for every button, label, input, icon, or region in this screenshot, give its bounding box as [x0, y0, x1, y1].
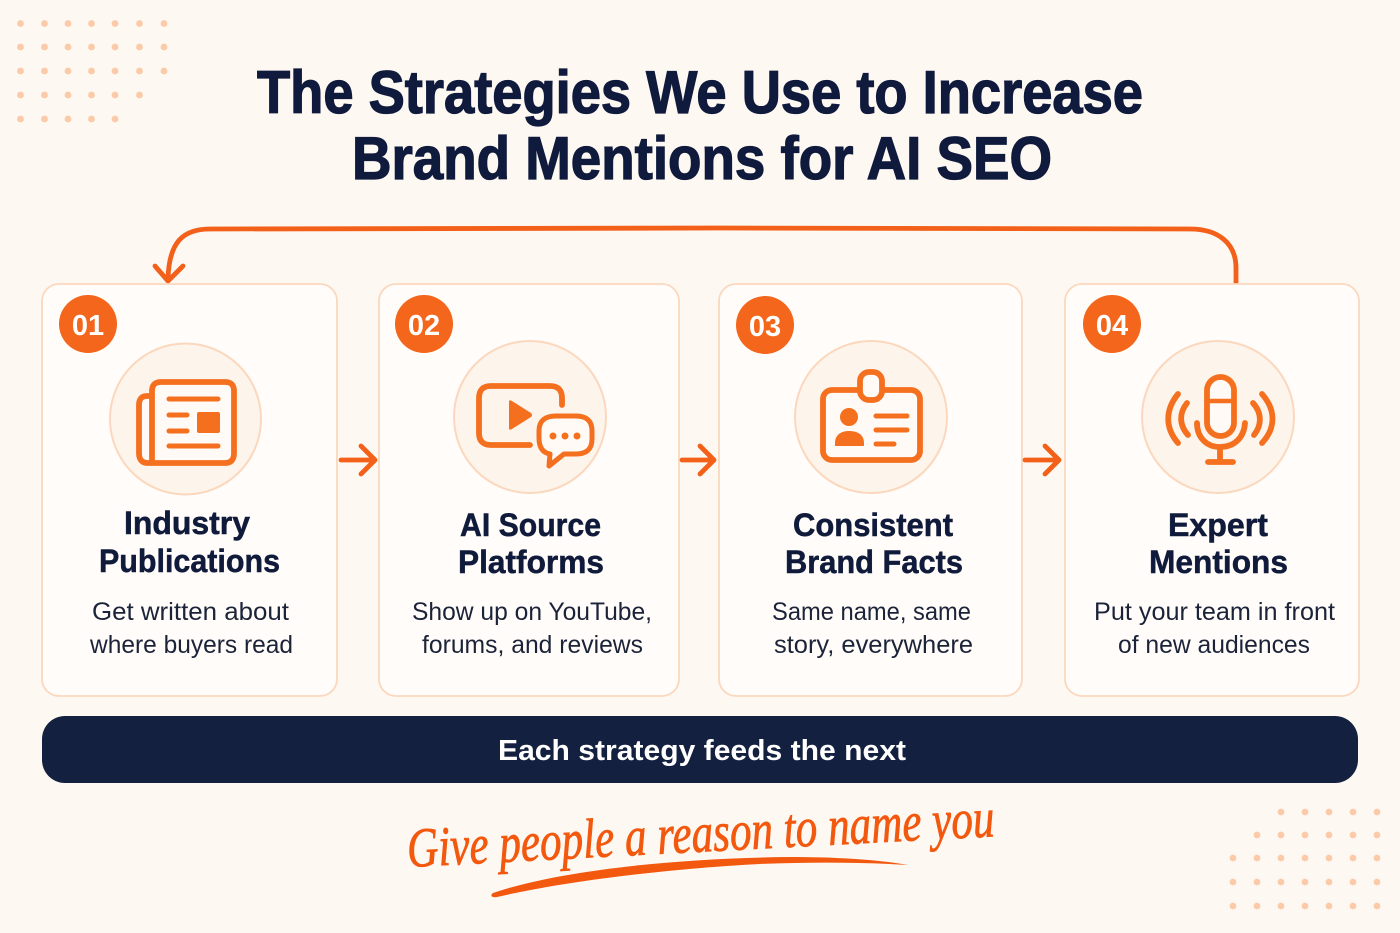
card heading: AI Source [460, 507, 601, 543]
step badge 02 [395, 295, 453, 353]
icon: newspaper [110, 344, 261, 494]
icon: video and chat bubble [454, 341, 606, 493]
card heading: Industry [124, 505, 250, 541]
card heading [99, 505, 280, 579]
title: Brand Mentions for AI SEO [352, 125, 1052, 192]
card description: Same name, same [772, 598, 971, 626]
panel: card 4 expert mentions [1065, 284, 1359, 696]
panel: card 2 AI source platforms [379, 284, 679, 696]
panel: card 1 industry publications [42, 284, 337, 696]
decorative dots top left [17, 20, 167, 122]
card heading [458, 507, 604, 580]
card heading: Expert [1168, 507, 1268, 543]
card heading: Platforms [458, 544, 604, 580]
title [257, 59, 1143, 192]
title: The Strategies We Use to Increase [257, 59, 1143, 126]
card description: Put your team in front [1094, 598, 1335, 626]
banner: each strategy feeds the next [42, 716, 1358, 783]
card heading [1149, 507, 1288, 580]
step badge 03 [736, 296, 794, 354]
card description [412, 598, 652, 659]
arrow: card 3 to card 4 [1025, 446, 1059, 474]
panel: card 3 consistent brand facts [719, 284, 1022, 696]
banner: each strategy feeds the next: Each strategy feeds the next [498, 735, 906, 767]
step badge 04 [1083, 295, 1141, 353]
card description: of new audiences [1118, 631, 1310, 659]
arrow: card 2 to card 3 [682, 446, 714, 474]
decorative dots bottom right [1230, 809, 1380, 909]
card description [89, 598, 293, 659]
card heading: Mentions [1149, 544, 1288, 580]
tagline with brush underline: Give people a reason to name you [405, 787, 996, 880]
card heading: Brand Facts [785, 544, 963, 580]
step badge 03: 03 [749, 311, 781, 343]
card description: where buyers read [89, 631, 293, 659]
card description [772, 598, 973, 659]
card description: forums, and reviews [422, 631, 643, 659]
card description: Get written about [92, 598, 289, 626]
card heading [785, 507, 963, 580]
card description: Show up on YouTube, [412, 598, 652, 626]
card description: story, everywhere [774, 631, 973, 659]
step badge 01 [59, 295, 117, 353]
loop arrow from card 4 back to card 1 [155, 228, 1236, 283]
step badge 02: 02 [408, 310, 440, 342]
card heading: Consistent [793, 507, 953, 543]
tagline with brush underline [405, 787, 996, 897]
step badge 01: 01 [72, 310, 104, 342]
icon: id badge [795, 341, 947, 493]
card heading: Publications [99, 543, 280, 579]
icon: microphone [1142, 341, 1294, 493]
card description [1094, 598, 1335, 659]
brush underline [491, 857, 908, 897]
step badge 04: 04 [1096, 310, 1128, 342]
arrow: card 1 to card 2 [341, 446, 375, 474]
